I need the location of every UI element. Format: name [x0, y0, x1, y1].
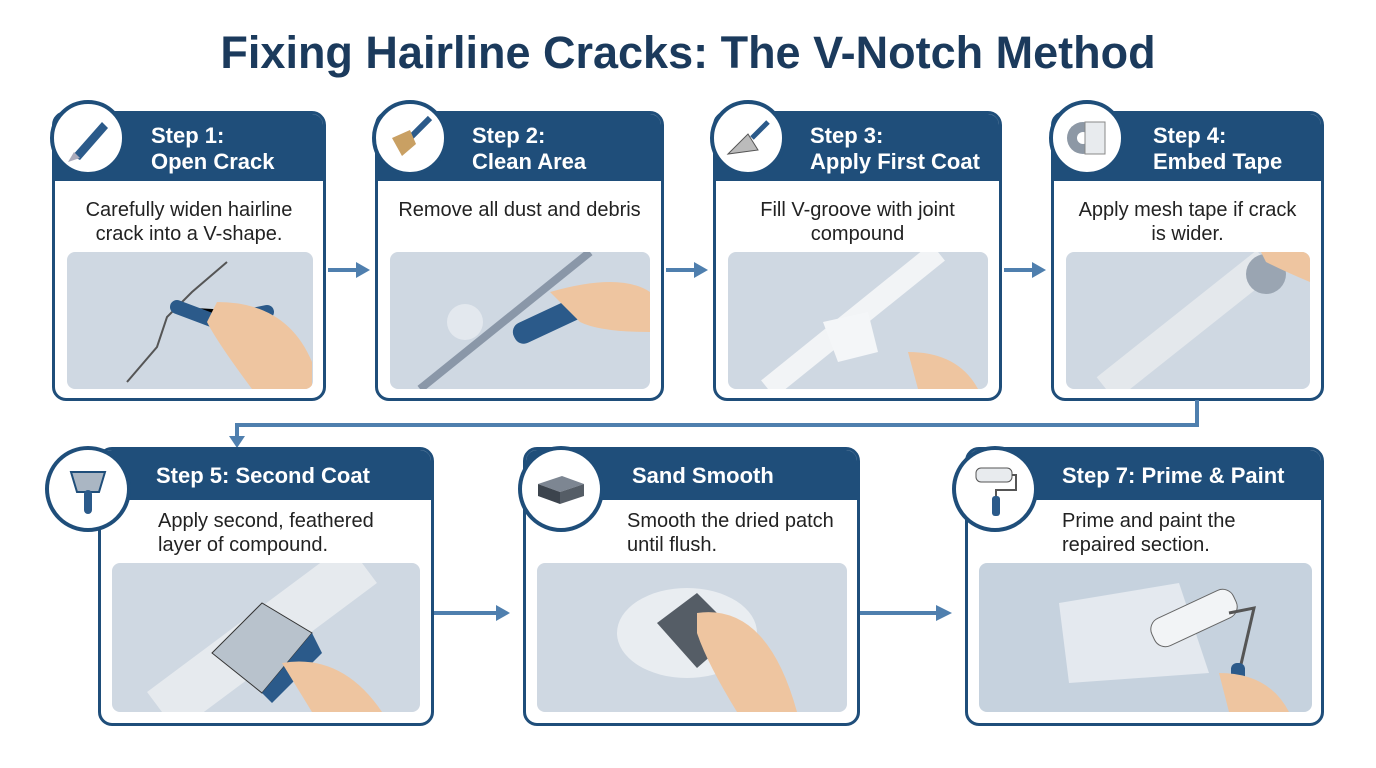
panel: step 4	[1051, 111, 1324, 401]
text: step 6: Smooth the dried patch	[627, 510, 834, 532]
text: step 7	[1062, 510, 1235, 556]
text: step 5: Apply second, feathered	[158, 510, 374, 532]
panel: step 1	[52, 111, 326, 401]
text: step 5	[158, 510, 374, 556]
panel: step 2	[375, 111, 664, 401]
arrow 5-6	[434, 605, 510, 621]
illustration: step 6	[537, 563, 847, 712]
illustration: step 5	[112, 563, 420, 712]
illustration: step 3	[728, 252, 988, 389]
text: step 6: until flush.	[627, 534, 717, 556]
panel: step 3	[713, 111, 1002, 401]
text: step 1: crack into a V-shape.	[96, 223, 282, 245]
text: step 5: layer of compound.	[158, 534, 328, 556]
header: step 5: Step 5: Second Coat	[156, 463, 370, 488]
illustration: step 1	[67, 252, 313, 389]
text: step 3: Fill V-groove with joint	[760, 199, 955, 221]
header: step 3: Apply First Coat	[810, 149, 980, 174]
header: step 7	[968, 450, 1321, 500]
illustration: step 4	[1066, 252, 1310, 389]
header: step 2: Step 2:	[472, 123, 545, 148]
header: step 7: Step 7: Prime & Paint	[1062, 463, 1285, 488]
header: step 1: Step 1:	[151, 123, 224, 148]
text: step 4: Apply mesh tape if crack	[1079, 199, 1296, 221]
icon: sanding block	[518, 446, 604, 532]
text: step 3: compound	[811, 223, 904, 245]
header: step 6: Sand Smooth	[632, 463, 774, 488]
arrow: connector row 1 to row 2	[229, 400, 1199, 447]
arrow 6-7	[860, 605, 952, 621]
header: step 6	[526, 450, 857, 500]
header: step 4	[1054, 114, 1321, 181]
icon: tape roll	[1049, 100, 1125, 176]
title: Fixing Hairline Cracks: The V-Notch Method	[220, 27, 1156, 78]
text: step 2: Remove all dust and debris	[398, 199, 641, 221]
text: step 7: repaired section.	[1062, 534, 1210, 556]
text: step 6	[627, 510, 834, 556]
icon: putty knife	[45, 446, 131, 532]
arrow 2-3	[666, 262, 708, 278]
header: step 3	[716, 114, 999, 181]
panel: step 7	[965, 447, 1324, 726]
header: step 4: Step 4:	[1153, 123, 1226, 148]
arrow 1-2	[328, 262, 370, 278]
icon: trowel	[710, 100, 786, 176]
header: step 3: Step 3:	[810, 123, 883, 148]
arrow 3-4	[1004, 262, 1046, 278]
header: step 2	[378, 114, 661, 181]
header: step 1	[55, 114, 323, 181]
header: step 5	[101, 450, 431, 500]
panel: step 5	[98, 447, 434, 726]
header: step 4: Embed Tape	[1153, 149, 1282, 174]
icon: utility knife	[50, 100, 126, 176]
icon: brush	[372, 100, 448, 176]
illustration: step 7	[979, 563, 1312, 712]
text: step 4: is wider.	[1151, 223, 1224, 245]
text: step 1	[86, 199, 292, 245]
text: step 4	[1078, 199, 1296, 245]
text: step 1: Carefully widen hairline	[86, 199, 292, 221]
text: step 7: Prime and paint the	[1062, 510, 1235, 532]
panel: step 6 sand smooth	[523, 447, 860, 726]
header: step 2: Clean Area	[472, 149, 586, 174]
icon: paint roller	[952, 446, 1038, 532]
illustration: step 2	[390, 252, 650, 389]
header: step 1: Open Crack	[151, 149, 274, 174]
text: step 3	[760, 199, 955, 245]
